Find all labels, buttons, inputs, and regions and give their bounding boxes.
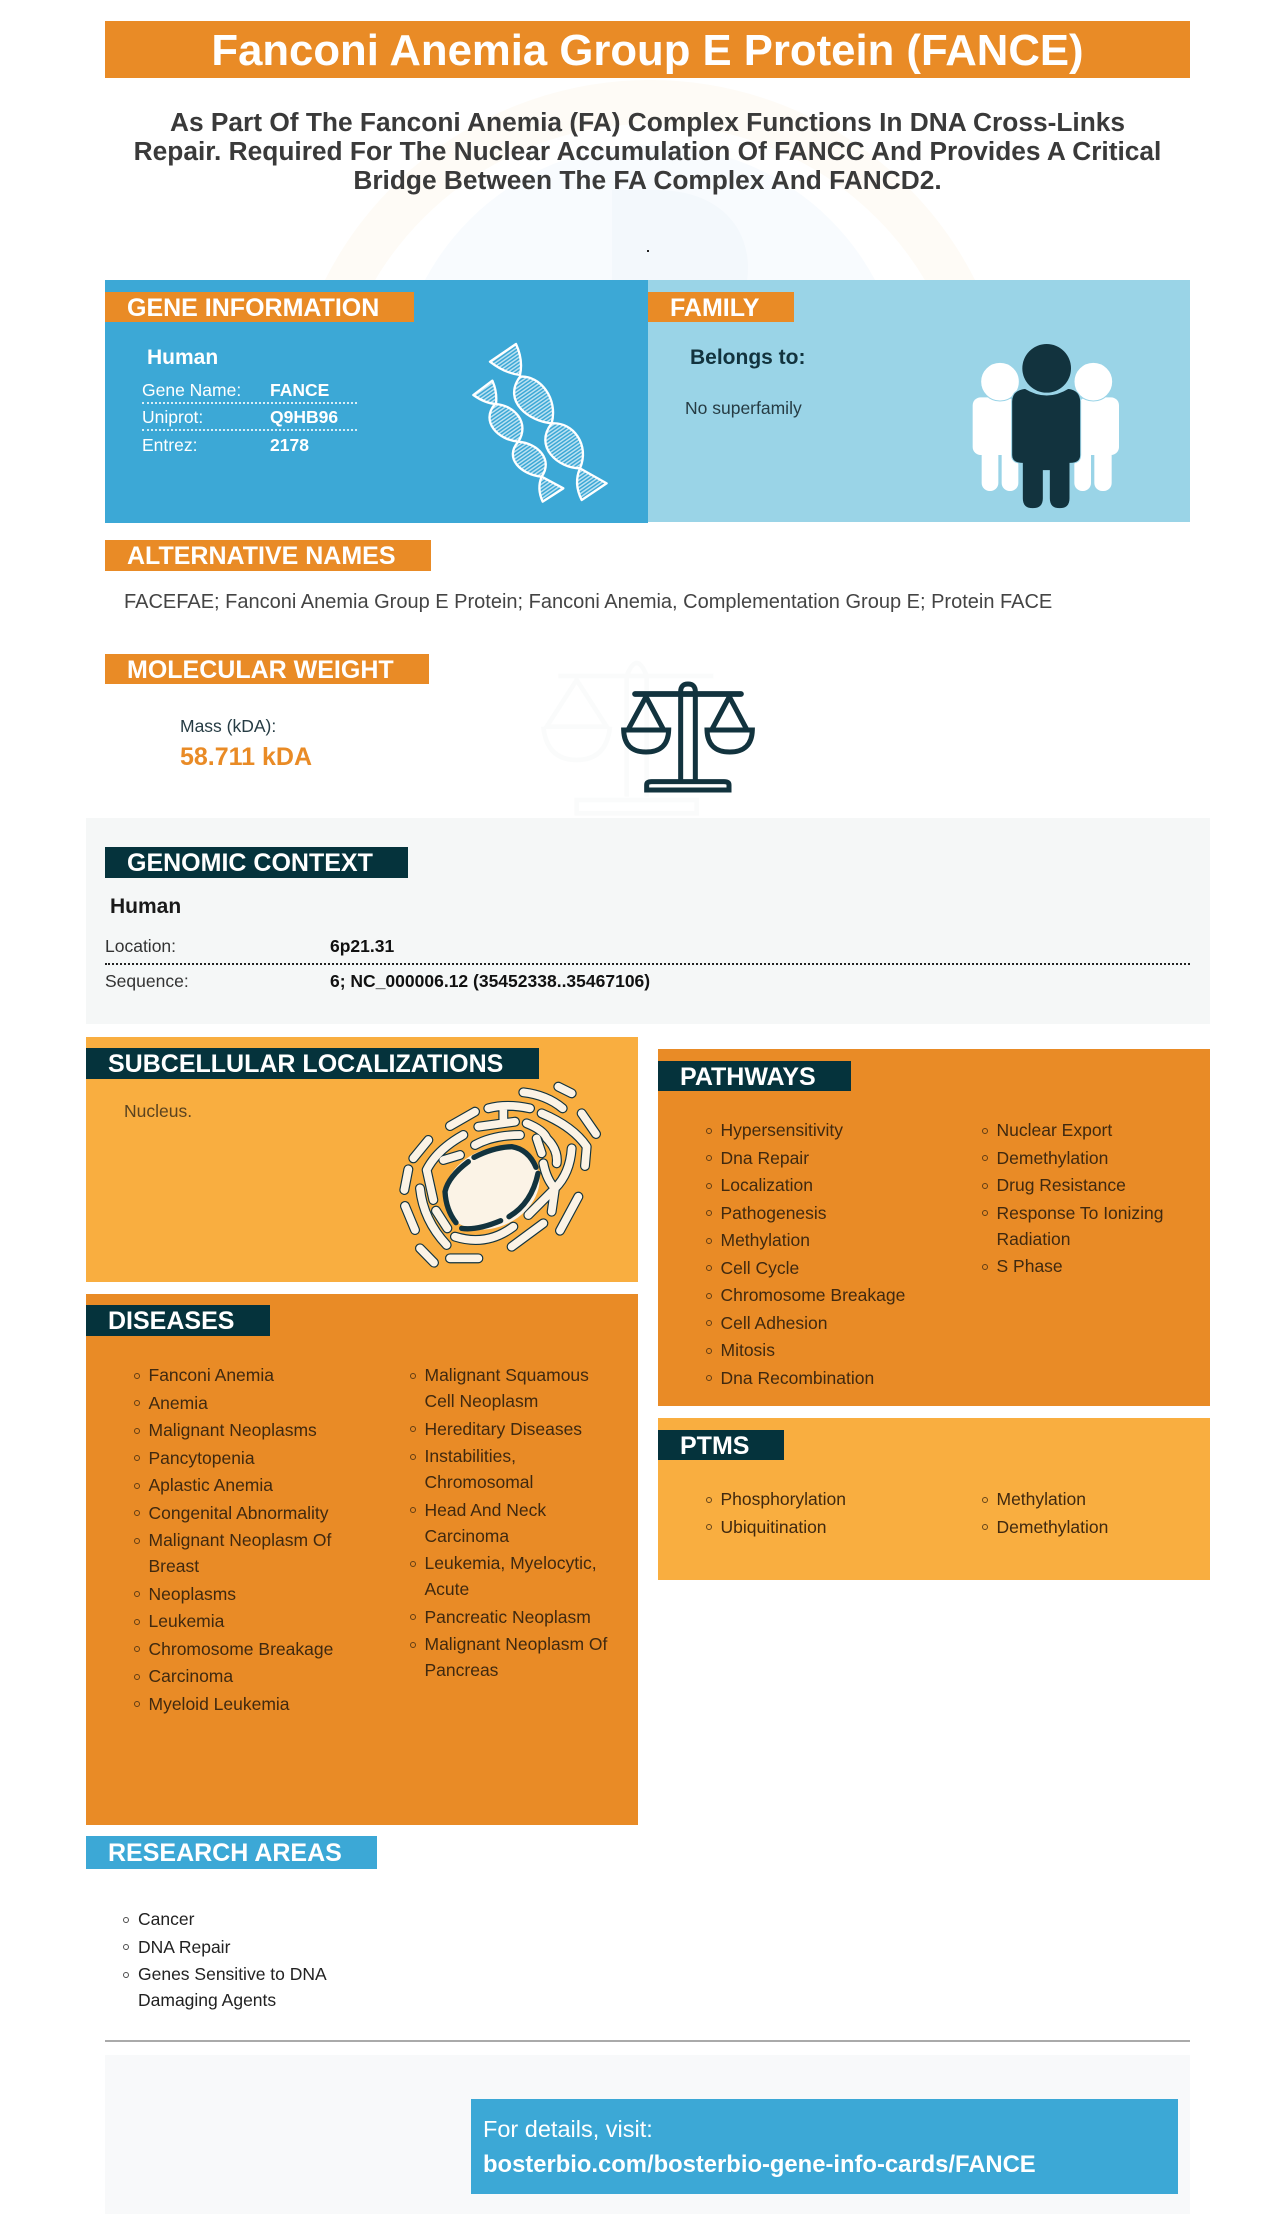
- icon: dna helices: [472, 342, 608, 503]
- subtitle description: Bridge Between The FA Complex And FANCD2.: [353, 165, 942, 195]
- mass label: Mass (kDA):: [180, 716, 276, 736]
- disease list column 2: Acute: [424, 1579, 469, 1599]
- disease list column 1: [134, 1365, 333, 1714]
- pathway list column 1: [706, 1120, 905, 1388]
- disease list column 1: Chromosome Breakage: [148, 1638, 333, 1658]
- uniprot row: Uniprot:: [142, 407, 203, 427]
- callout url: bosterbio.com/bosterbio-gene-info-cards/FANCE: [483, 2151, 1036, 2178]
- panel: diseases: [86, 1294, 638, 1825]
- heading: molecular weight: MOLECULAR WEIGHT: [127, 656, 394, 684]
- subtitle description: As Part Of The Fanconi Anemia (FA) Complex Functions In DNA Cross-Links: [170, 107, 1125, 137]
- heading: ptms: PTMS: [680, 1432, 749, 1460]
- location row: 6p21.31: [330, 936, 394, 956]
- heading: genomic context: GENOMIC CONTEXT: [127, 849, 373, 877]
- research areas list: [123, 1909, 327, 2010]
- disease list column 1: Congenital Abnormality: [148, 1502, 328, 1522]
- subtitle description: Repair. Required For The Nuclear Accumulation Of FANCC And Provides A Critical: [134, 136, 1161, 166]
- disease list column 2: Carcinoma: [424, 1526, 509, 1546]
- heading: subcellular localizations: SUBCELLULAR LOCALIZATIONS: [108, 1050, 503, 1078]
- title banner: Fanconi Anemia Group E Protein (FANCE): [211, 26, 1084, 75]
- icon: group of people: [972, 344, 1119, 508]
- pathway list column 1: Cell Adhesion: [720, 1312, 828, 1332]
- pathway list column 2: Response To Ionizing: [996, 1202, 1164, 1222]
- gene name row: [142, 380, 329, 400]
- heading: diseases: DISEASES: [108, 1307, 234, 1335]
- localization text: Nucleus.: [124, 1101, 192, 1121]
- pathway list column 2: Drug Resistance: [996, 1175, 1126, 1195]
- panel: family: [648, 280, 1190, 522]
- pathway list column 2: S Phase: [996, 1256, 1063, 1276]
- pathway list column 1: Pathogenesis: [720, 1202, 827, 1222]
- species label: Human: [147, 346, 218, 369]
- heading: family: FAMILY: [670, 294, 759, 322]
- pathway list column 2: Demethylation: [996, 1148, 1108, 1168]
- pathway list column 1: Cell Cycle: [720, 1258, 799, 1278]
- pathway list column 1: Localization: [720, 1175, 813, 1195]
- mass value: 58.711 kDA: [180, 743, 312, 771]
- gene name row: Gene Name:: [142, 380, 241, 400]
- heading: ptms: [658, 1430, 784, 1460]
- title banner: [105, 21, 1190, 78]
- research areas list: DNA Repair: [138, 1936, 230, 1956]
- pathway list column 1: Dna Repair: [720, 1148, 809, 1168]
- ptm list column 1: Ubiquitination: [720, 1516, 827, 1536]
- entrez row: [142, 435, 309, 455]
- uniprot row: Q9HB96: [270, 407, 338, 427]
- gene name row: FANCE: [270, 380, 329, 400]
- heading: gene information: GENE INFORMATION: [127, 294, 379, 322]
- pathway list column 2: Radiation: [996, 1228, 1070, 1248]
- subtitle description: [134, 107, 1161, 195]
- disease list column 2: Malignant Neoplasm Of: [424, 1634, 607, 1654]
- background watermark logo: [326, 80, 974, 280]
- ptm list column 1: [706, 1489, 846, 1536]
- location row: Location:: [105, 936, 176, 956]
- panel: gene information: [105, 280, 648, 523]
- disease list column 1: Pancytopenia: [148, 1448, 255, 1468]
- heading: research areas: RESEARCH AREAS: [108, 1839, 342, 1867]
- disease list column 1: Aplastic Anemia: [148, 1475, 273, 1495]
- pathway list column 1: Dna Recombination: [720, 1368, 874, 1388]
- disease list column 1: Carcinoma: [148, 1666, 233, 1686]
- entrez row: Entrez:: [142, 435, 197, 455]
- disease list column 1: Neoplasms: [148, 1584, 236, 1604]
- heading: alternative names: ALTERNATIVE NAMES: [127, 542, 396, 570]
- sequence row: Sequence:: [105, 971, 189, 991]
- pathway list column 1: Chromosome Breakage: [720, 1285, 905, 1305]
- heading: pathways: PATHWAYS: [680, 1063, 816, 1091]
- disease list column 1: Fanconi Anemia: [148, 1365, 274, 1385]
- heading: pathways: [658, 1061, 851, 1091]
- location row: [105, 936, 394, 956]
- disease list column 1: Leukemia: [148, 1611, 224, 1631]
- research areas list: Genes Sensitive to DNA: [138, 1964, 327, 1984]
- disease list column 2: Cell Neoplasm: [424, 1391, 538, 1411]
- ptm list column 2: Methylation: [996, 1489, 1086, 1509]
- disease list column 1: Malignant Neoplasms: [148, 1420, 317, 1440]
- heading: family: [648, 292, 794, 322]
- disease list column 2: Pancreatic Neoplasm: [424, 1606, 591, 1626]
- disease list column 1: Breast: [148, 1556, 199, 1576]
- panel: footer: [105, 2055, 1190, 2214]
- ptm list column 2: Demethylation: [996, 1516, 1108, 1536]
- disease list column 2: Head And Neck: [424, 1500, 546, 1520]
- entrez row: 2178: [270, 435, 309, 455]
- callout intro text: For details, visit:: [483, 2116, 653, 2142]
- disease list column 2: Instabilities,: [424, 1446, 516, 1466]
- disease list column 1: Malignant Neoplasm Of: [148, 1530, 331, 1550]
- alternative names text: FACEFAE; Fanconi Anemia Group E Protein; Fanconi Anemia, Complementation Group E; Protein FACE: [124, 591, 1052, 613]
- disease list column 2: Pancreas: [424, 1660, 498, 1680]
- panel: genomic context: [86, 818, 1210, 1024]
- panel: pathways: [658, 1049, 1210, 1406]
- disease list column 2: Leukemia, Myelocytic,: [424, 1553, 597, 1573]
- research areas list: Cancer: [138, 1909, 194, 1929]
- disease list column 1: Anemia: [148, 1392, 208, 1412]
- pathway list column 2: Nuclear Export: [996, 1120, 1112, 1140]
- sequence row: [105, 971, 650, 991]
- sequence row: 6; NC_000006.12 (35452338..35467106): [330, 971, 650, 991]
- heading: diseases: [86, 1305, 270, 1336]
- pathway list column 1: Hypersensitivity: [720, 1120, 843, 1140]
- family value: No superfamily: [685, 398, 802, 418]
- disease list column 2: [410, 1365, 608, 1680]
- small dot mark: [647, 250, 649, 252]
- panel: subcellular localizations: [86, 1037, 638, 1282]
- species label: Human: [110, 895, 181, 918]
- research areas list: Damaging Agents: [138, 1990, 276, 2010]
- panel: ptms: [658, 1418, 1210, 1580]
- disease list column 2: Malignant Squamous: [424, 1365, 589, 1385]
- icon: balance scale watermark: [520, 650, 780, 830]
- belongs to label: Belongs to:: [690, 346, 806, 369]
- callout: details link: [471, 2099, 1178, 2194]
- pathway list column 1: Mitosis: [720, 1340, 775, 1360]
- icon: cell nucleus and organelles: [399, 1082, 601, 1268]
- disease list column 2: Hereditary Diseases: [424, 1418, 582, 1438]
- disease list column 2: Chromosomal: [424, 1472, 533, 1492]
- uniprot row: [142, 407, 338, 427]
- pathway list column 2: [982, 1120, 1164, 1276]
- ptm list column 1: Phosphorylation: [720, 1489, 846, 1509]
- disease list column 1: Myeloid Leukemia: [148, 1694, 290, 1714]
- ptm list column 2: [982, 1489, 1108, 1536]
- icon: balance scale: [621, 682, 755, 792]
- heading: research areas: [86, 1836, 377, 1869]
- pathway list column 1: Methylation: [720, 1230, 810, 1250]
